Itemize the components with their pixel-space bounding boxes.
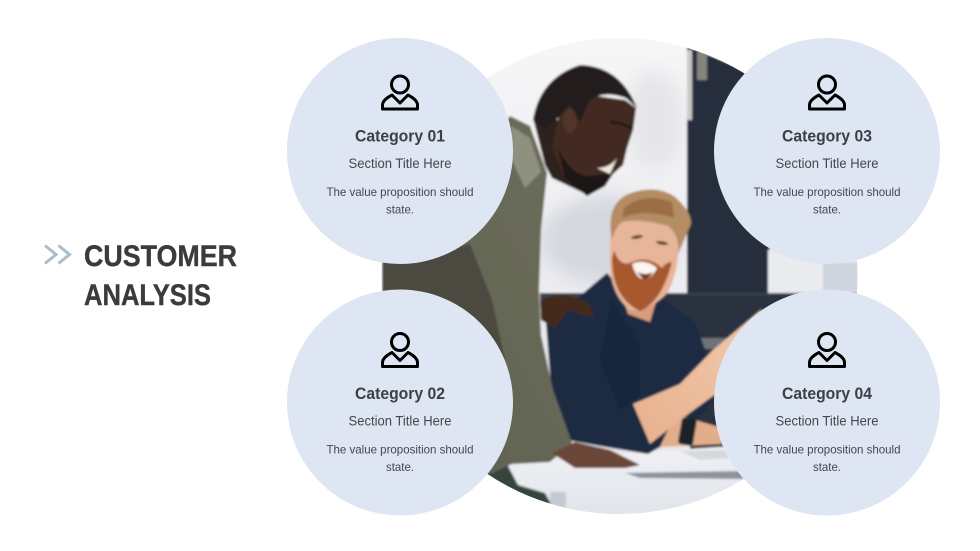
text: category 02: The value proposition should xyxy=(326,442,474,456)
text: category 04: The value proposition should xyxy=(754,442,900,456)
title: customer analysis xyxy=(84,240,237,312)
man one neck and head xyxy=(533,118,588,195)
text: category 03 xyxy=(754,126,900,216)
text: category 04: Section Title Here xyxy=(776,414,878,428)
title: customer analysis: CUSTOMER xyxy=(84,240,237,273)
man two neck and head xyxy=(624,302,658,324)
photo: two smiling colleagues at a desk xyxy=(380,36,860,520)
desk xyxy=(506,444,724,502)
text: category 01: Category 01 xyxy=(355,126,445,146)
text: category 01: The value proposition should xyxy=(326,185,474,199)
text: category 01: Section Title Here xyxy=(348,156,452,171)
man two shirt xyxy=(546,273,714,454)
text: category 01 xyxy=(326,126,474,216)
text: category 04: Category 04 xyxy=(782,384,872,403)
text: category 01: state. xyxy=(386,202,414,216)
icon: person xyxy=(382,334,418,366)
window frame xyxy=(687,46,770,296)
text: category 03: state. xyxy=(813,202,841,216)
panel: category 02 xyxy=(287,290,513,516)
man one hands xyxy=(540,295,594,328)
text: category 02 xyxy=(326,384,474,474)
panel: category 03 xyxy=(714,38,940,264)
text: category 03: Category 03 xyxy=(782,126,872,146)
man two arm xyxy=(633,309,762,444)
text: category 04: state. xyxy=(813,460,841,474)
man one shirt xyxy=(382,116,572,474)
text: category 02: Category 02 xyxy=(355,384,445,403)
panel: category 04 xyxy=(714,290,940,516)
text: category 02: state. xyxy=(386,460,414,474)
title: customer analysis: ANALYSIS xyxy=(84,279,211,312)
icon: person xyxy=(382,76,418,109)
panel: category 01 xyxy=(287,38,513,264)
text: category 02: Section Title Here xyxy=(348,414,452,428)
icon: double chevron xyxy=(45,246,70,264)
icon: person xyxy=(810,76,844,109)
text: category 03: Section Title Here xyxy=(776,156,878,171)
text: category 04 xyxy=(754,384,900,474)
text: category 03: The value proposition should xyxy=(754,185,900,199)
icon: person xyxy=(810,334,844,366)
